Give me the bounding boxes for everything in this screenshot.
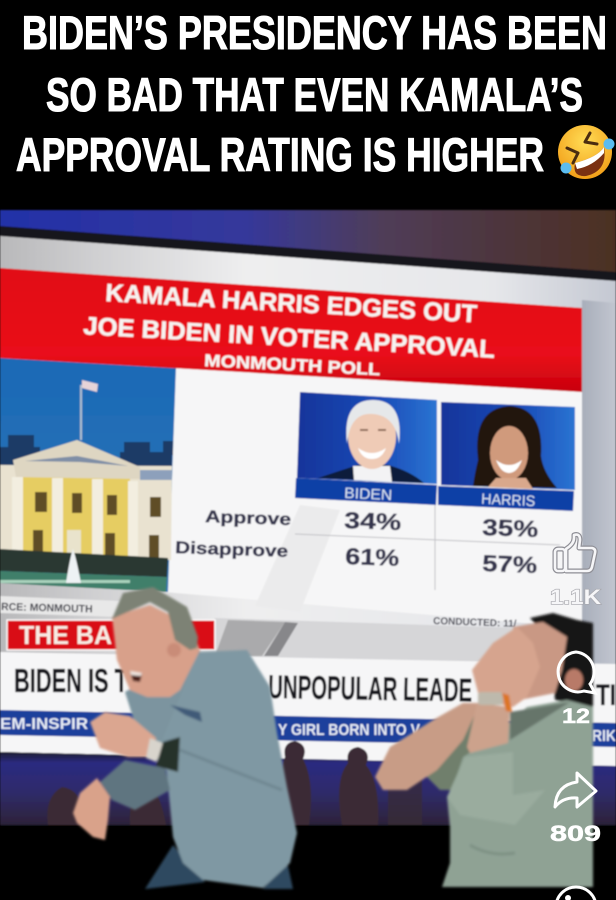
video wall top edge <box>0 226 616 281</box>
right wall stripes <box>582 300 616 770</box>
ticker text: Y GIRL BORN INTO V <box>278 722 420 739</box>
icon: partial circle button <box>556 887 596 900</box>
forearm right <box>467 703 510 753</box>
the ballot tag <box>7 620 215 650</box>
lower third headline: BIDEN IS T <box>14 662 128 699</box>
sweater body <box>162 650 297 888</box>
name band: harris: HARRIS <box>481 491 536 510</box>
the ballot tag: THE BA <box>19 620 112 650</box>
source strip: RCE: MONMOUTH <box>1 601 93 615</box>
ticker blue strip <box>0 710 616 747</box>
hair <box>112 587 198 650</box>
entrance <box>67 530 81 554</box>
like count: 1.1K <box>550 586 601 609</box>
head skin <box>112 605 200 697</box>
ticker text: EM-INSPIR <box>0 716 88 733</box>
wrist band <box>146 738 165 762</box>
hands over face <box>472 627 540 707</box>
headline banner <box>0 268 582 392</box>
jeans <box>145 845 293 889</box>
lower third <box>0 618 616 766</box>
lower third headline: UNPOPULAR LEADE <box>268 668 472 709</box>
name band: harris <box>438 486 574 511</box>
social action icons <box>550 535 601 900</box>
shirt sleeve behind <box>425 710 480 790</box>
collar shadow <box>170 705 202 722</box>
panel: poll graphic <box>0 268 582 630</box>
tv studio video frame <box>0 210 616 900</box>
studio top band <box>0 210 616 285</box>
studio floor <box>0 752 616 825</box>
background figures <box>47 741 422 825</box>
name band: biden <box>295 478 437 505</box>
name band: biden: BIDEN <box>344 485 393 504</box>
ticker text <box>0 716 616 745</box>
hair <box>530 613 593 707</box>
conducted note: CONDUCTED: 11/ <box>433 616 517 630</box>
photo: harris <box>441 402 575 490</box>
poll table rows: 61% <box>345 543 400 571</box>
white house photo <box>0 357 176 592</box>
shirt <box>442 700 593 887</box>
ear <box>167 643 181 657</box>
face <box>513 622 567 700</box>
trees and lawn <box>0 549 168 577</box>
white poll panel <box>164 365 582 628</box>
poll table rows: Approve <box>205 507 291 529</box>
title <box>16 6 607 181</box>
source strip <box>0 596 120 617</box>
hand down <box>73 778 110 840</box>
headline: kamala harris edges out: KAMALA HARRIS EDGES OUT <box>105 279 478 328</box>
poll table rows: 34% <box>344 507 402 535</box>
lower third headline <box>14 662 616 712</box>
ticker white strip <box>0 652 616 766</box>
video wall background <box>0 234 616 775</box>
poll table rows <box>175 507 539 578</box>
icon: rolling on the floor laughing emoji <box>558 125 614 179</box>
wristwatch <box>156 737 180 772</box>
black stage foreground <box>0 825 616 900</box>
collar shadow <box>510 702 570 740</box>
sleeve cuff <box>447 752 545 825</box>
headline: kamala harris edges out: JOE BIDEN IN VOTER APPROVAL <box>83 312 496 364</box>
icon: comment bubble <box>558 652 595 693</box>
sweater chest <box>125 650 200 770</box>
forearm left <box>375 703 480 790</box>
raised fist <box>90 712 156 757</box>
icon: like thumb <box>555 535 595 571</box>
headline: kamala harris edges out <box>83 279 496 379</box>
person: man covering face right <box>375 613 593 887</box>
icon: share arrow <box>555 773 596 807</box>
flag <box>80 385 82 440</box>
distant buildings <box>0 435 173 468</box>
share count: 809 <box>550 821 601 846</box>
poll table rows: 35% <box>482 514 539 542</box>
person: laughing man left <box>73 587 297 889</box>
headline: kamala harris edges out: MONMOUTH POLL <box>204 351 381 379</box>
gray angled panels <box>190 618 582 664</box>
fountain <box>66 549 81 583</box>
photo: biden <box>297 392 437 484</box>
poll table rows: 57% <box>482 550 538 578</box>
white house building <box>0 465 172 560</box>
ear <box>565 669 583 691</box>
mouth <box>130 672 142 682</box>
left lower arm <box>100 760 170 810</box>
wristwatch <box>478 692 503 705</box>
comment count: 12 <box>562 705 590 728</box>
poll table rows: Disapprove <box>175 538 288 561</box>
